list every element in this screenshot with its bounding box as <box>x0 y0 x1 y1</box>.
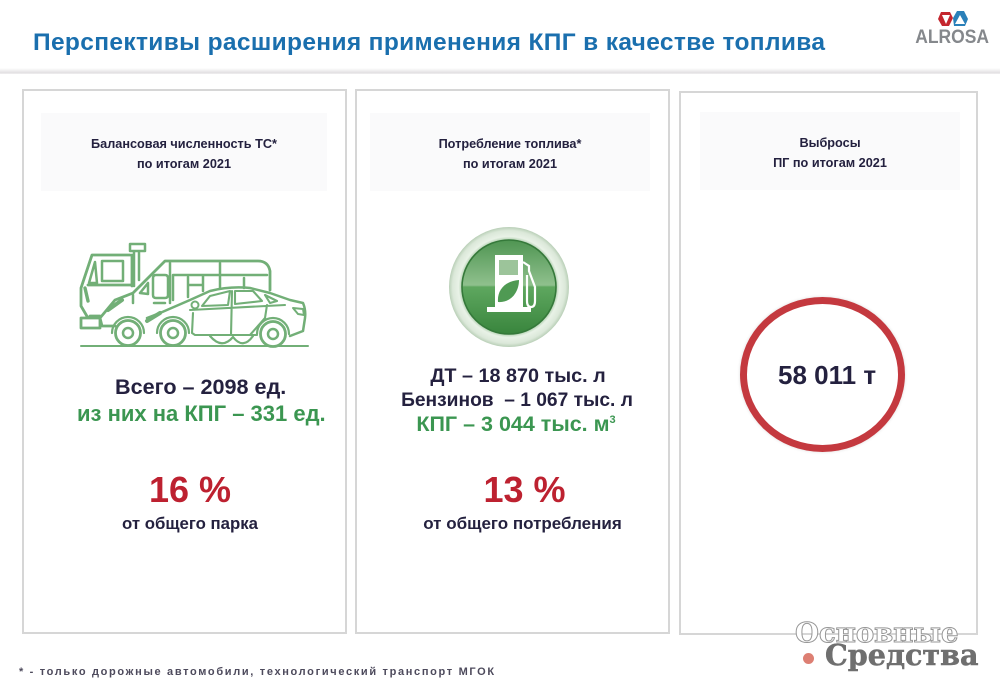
caption: share of consumption: от общего потребления <box>423 514 622 533</box>
panel heading: fuel: по итогам 2021 <box>463 157 557 171</box>
text: vehicles on CNG: из них на КПГ – 331 ед. <box>77 401 326 426</box>
panel heading: vehicles: Балансовая численность ТС* <box>91 137 277 151</box>
text: petrol figure: Бензинов – 1 067 тыс. л <box>401 390 633 411</box>
stat: 58 011 t: 58 011 т <box>778 360 876 390</box>
stat: 16 %: 16 % <box>149 469 231 510</box>
caption: share of fleet: от общего парка <box>122 514 258 533</box>
text: fuel figures: ДТ – 18 870 тыс. л <box>430 365 606 387</box>
ring: emissions figure <box>740 297 905 452</box>
logo: ALROSA: ALROSA <box>915 27 989 48</box>
icon: truck, van and car <box>80 242 309 348</box>
panel: vehicles <box>22 89 347 634</box>
panel: emissions <box>679 91 978 635</box>
watermark: Osnovnye Sredstva: Средства <box>825 638 979 672</box>
text: vehicle totals: Всего – 2098 ед. <box>115 374 286 399</box>
panel heading: vehicles <box>41 113 327 191</box>
text: CNG figure: КПГ – 3 044 тыс. м3 <box>416 412 616 436</box>
footnote: * - только дорожные автомобили, технологический транспорт МГОК <box>19 666 496 678</box>
panel heading: fuel <box>370 113 650 191</box>
watermark: Osnovnye Sredstva <box>795 617 979 672</box>
wheels <box>112 317 289 334</box>
title: Перспективы расширения применения КПГ в качестве топлива <box>33 29 825 56</box>
panel heading: fuel: Потребление топлива* <box>439 137 581 151</box>
car <box>147 287 305 336</box>
panel heading: emissions: Выбросы <box>799 136 861 150</box>
panel heading: vehicles: по итогам 2021 <box>137 157 231 171</box>
icon: green fuel pump <box>449 227 569 347</box>
logo: ALROSA <box>915 11 989 48</box>
panel heading: emissions <box>700 112 960 190</box>
watermark: Osnovnye Sredstva: Основные <box>795 617 958 649</box>
truck <box>81 255 132 328</box>
panel: fuel consumption <box>355 89 670 634</box>
van <box>100 261 270 326</box>
stat: 13 %: 13 % <box>483 469 566 510</box>
header shadow band <box>0 68 1000 74</box>
panel heading: emissions: ПГ по итогам 2021 <box>773 156 887 170</box>
